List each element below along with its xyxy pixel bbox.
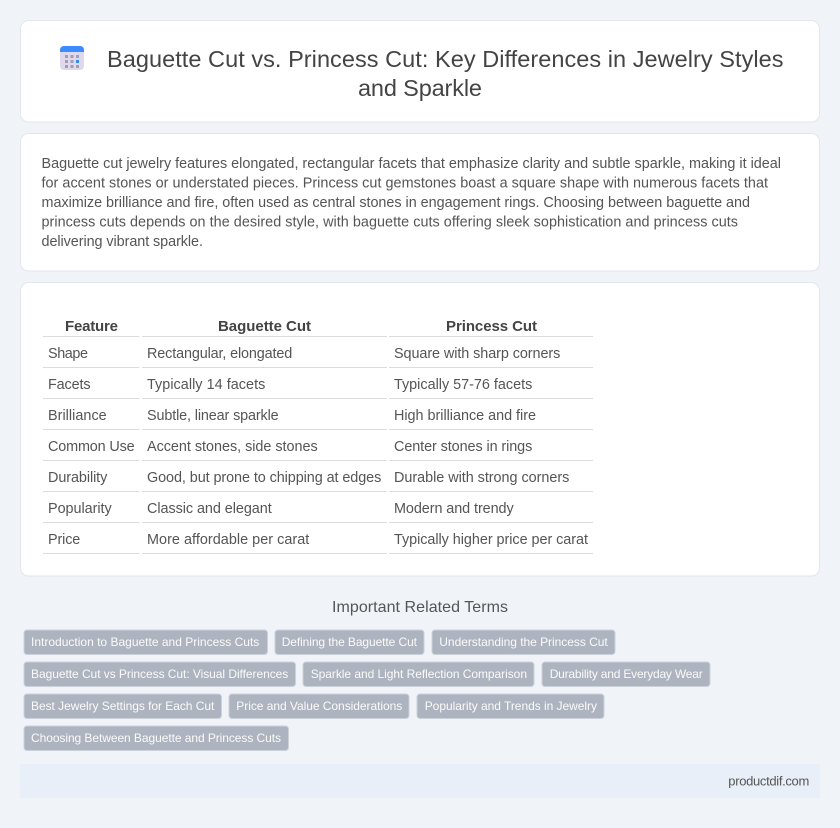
panel: comparison table bbox=[20, 282, 820, 576]
tag bbox=[24, 694, 222, 718]
tag: Defining the Baguette Cut bbox=[282, 635, 418, 649]
table row: shape: Square with sharp corners bbox=[394, 346, 560, 362]
tag: Best Jewelry Settings for Each Cut bbox=[31, 699, 215, 713]
tag: Price and Value Considerations bbox=[236, 699, 402, 713]
title: Baguette Cut vs. Princess Cut: Key Differences in Jewelry Styles bbox=[107, 46, 784, 72]
text block: intro: maximize brilliance and fire, often used as central stones in engagement rings. Choosing between baguette and bbox=[42, 195, 750, 211]
tag bbox=[303, 662, 534, 686]
tag bbox=[542, 662, 710, 686]
tag bbox=[417, 694, 604, 718]
table row: facets: Facets bbox=[48, 377, 91, 393]
table row: common use: Accent stones, side stones bbox=[147, 439, 318, 455]
table header row: Feature bbox=[65, 318, 118, 335]
table row: brilliance bbox=[43, 408, 593, 430]
table row: common use: Common Use bbox=[48, 439, 135, 455]
footer: productdif.com bbox=[728, 774, 809, 788]
tag: Understanding the Princess Cut bbox=[439, 635, 608, 649]
heading: related terms: Important Related Terms bbox=[332, 599, 508, 616]
table row: shape bbox=[43, 346, 593, 368]
table row: brilliance: Subtle, linear sparkle bbox=[147, 408, 279, 424]
tag bbox=[432, 630, 615, 654]
table row: facets: Typically 57-76 facets bbox=[394, 377, 532, 393]
tag: Baguette Cut vs Princess Cut: Visual Differences bbox=[31, 667, 288, 681]
tag bbox=[229, 694, 409, 718]
text block: intro: princess cuts depends on the desired style, with baguette cuts offering sleek sophistication and princess cuts bbox=[42, 214, 738, 230]
table row: popularity bbox=[43, 501, 593, 523]
tag: Durability and Everyday Wear bbox=[550, 667, 703, 681]
panel: intro paragraph bbox=[20, 134, 820, 271]
table row: facets bbox=[43, 377, 593, 399]
tag bbox=[24, 726, 288, 750]
table row: common use bbox=[43, 439, 593, 461]
table row: price: Price bbox=[48, 532, 80, 548]
panel: header bbox=[20, 20, 820, 122]
text block: intro: delivering vibrant sparkle. bbox=[42, 234, 203, 250]
footer bbox=[20, 764, 820, 798]
table row: common use: Center stones in rings bbox=[394, 439, 532, 455]
table row: facets: Typically 14 facets bbox=[147, 377, 265, 393]
table row: popularity: Classic and elegant bbox=[147, 501, 272, 517]
text block: intro: for accent stones or understated pieces. Princess cut gemstones boast a square shape with numerous facets that bbox=[42, 176, 768, 192]
tag bbox=[24, 630, 268, 654]
table row: price bbox=[43, 532, 593, 554]
table row: shape: Shape bbox=[48, 346, 88, 362]
table row: popularity: Modern and trendy bbox=[394, 501, 514, 517]
tag bbox=[24, 662, 296, 686]
text block: intro: Baguette cut jewelry features elongated, rectangular facets that emphasize clarity and subtle sparkle, making it ideal bbox=[42, 156, 781, 172]
table header row bbox=[43, 318, 593, 337]
title bbox=[107, 46, 784, 101]
table row: shape: Rectangular, elongated bbox=[147, 346, 292, 362]
table row: durability: Good, but prone to chipping at edges bbox=[147, 470, 381, 486]
tag: Sparkle and Light Reflection Comparison bbox=[311, 667, 527, 681]
table row: durability bbox=[43, 470, 593, 492]
table header row: Princess Cut bbox=[446, 318, 537, 335]
tag: Choosing Between Baguette and Princess Cuts bbox=[31, 731, 281, 745]
table header row: Baguette Cut bbox=[218, 318, 311, 335]
text block: intro bbox=[42, 156, 781, 250]
table row: brilliance: Brilliance bbox=[48, 408, 107, 424]
tag: Popularity and Trends in Jewelry bbox=[425, 699, 597, 713]
icon: calendar bbox=[60, 46, 84, 70]
table row: brilliance: High brilliance and fire bbox=[394, 408, 536, 424]
table row: price: Typically higher price per carat bbox=[394, 532, 588, 548]
table row: durability: Durable with strong corners bbox=[394, 470, 569, 486]
tag list: related terms bbox=[24, 630, 710, 750]
table row: price: More affordable per carat bbox=[147, 532, 309, 548]
title: and Sparkle bbox=[358, 75, 482, 101]
tag bbox=[275, 630, 424, 654]
tag: Introduction to Baguette and Princess Cuts bbox=[31, 635, 259, 649]
table row: popularity: Popularity bbox=[48, 501, 112, 517]
table row: durability: Durability bbox=[48, 470, 108, 486]
